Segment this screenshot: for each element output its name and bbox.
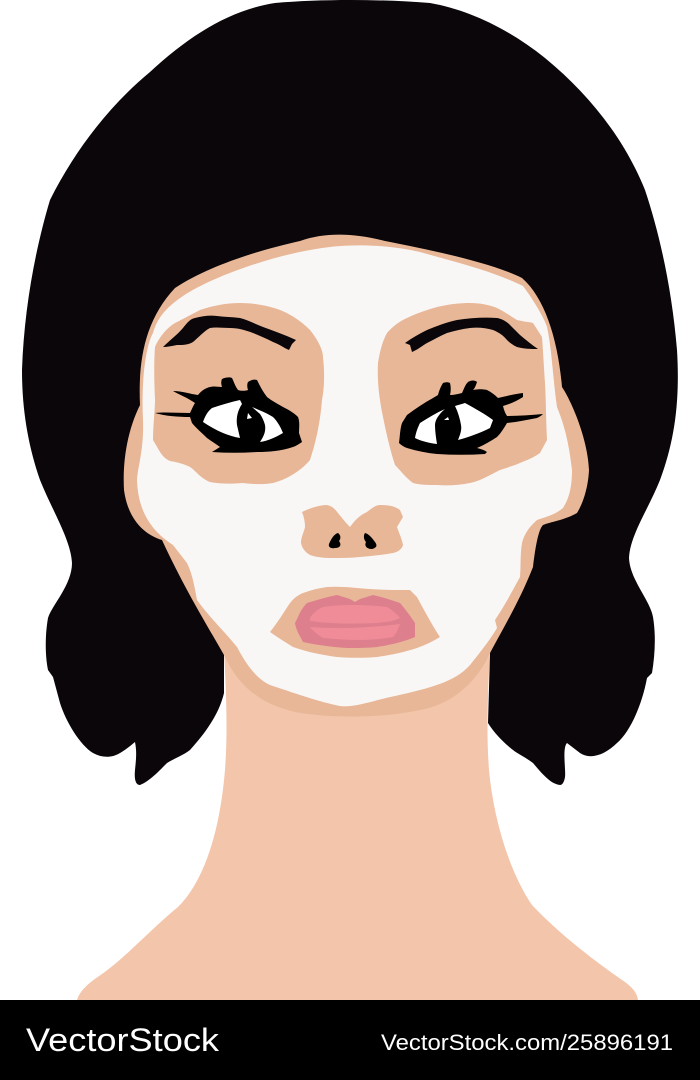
right eye patch <box>378 303 547 485</box>
neck and shoulders <box>77 650 638 1000</box>
left eyebrow <box>163 316 296 350</box>
right eye <box>399 380 543 455</box>
hair <box>22 0 678 785</box>
left eye <box>155 377 302 453</box>
watermark bar <box>0 1000 700 1080</box>
left eye patch <box>153 303 324 484</box>
nose <box>301 505 403 558</box>
mouth <box>270 587 440 658</box>
right eyebrow <box>405 318 538 352</box>
white mask <box>137 245 572 706</box>
face skin <box>124 235 589 717</box>
brand name: VectorStock <box>26 1022 220 1058</box>
stock url: VectorStock.com/25896191 <box>381 1030 673 1055</box>
